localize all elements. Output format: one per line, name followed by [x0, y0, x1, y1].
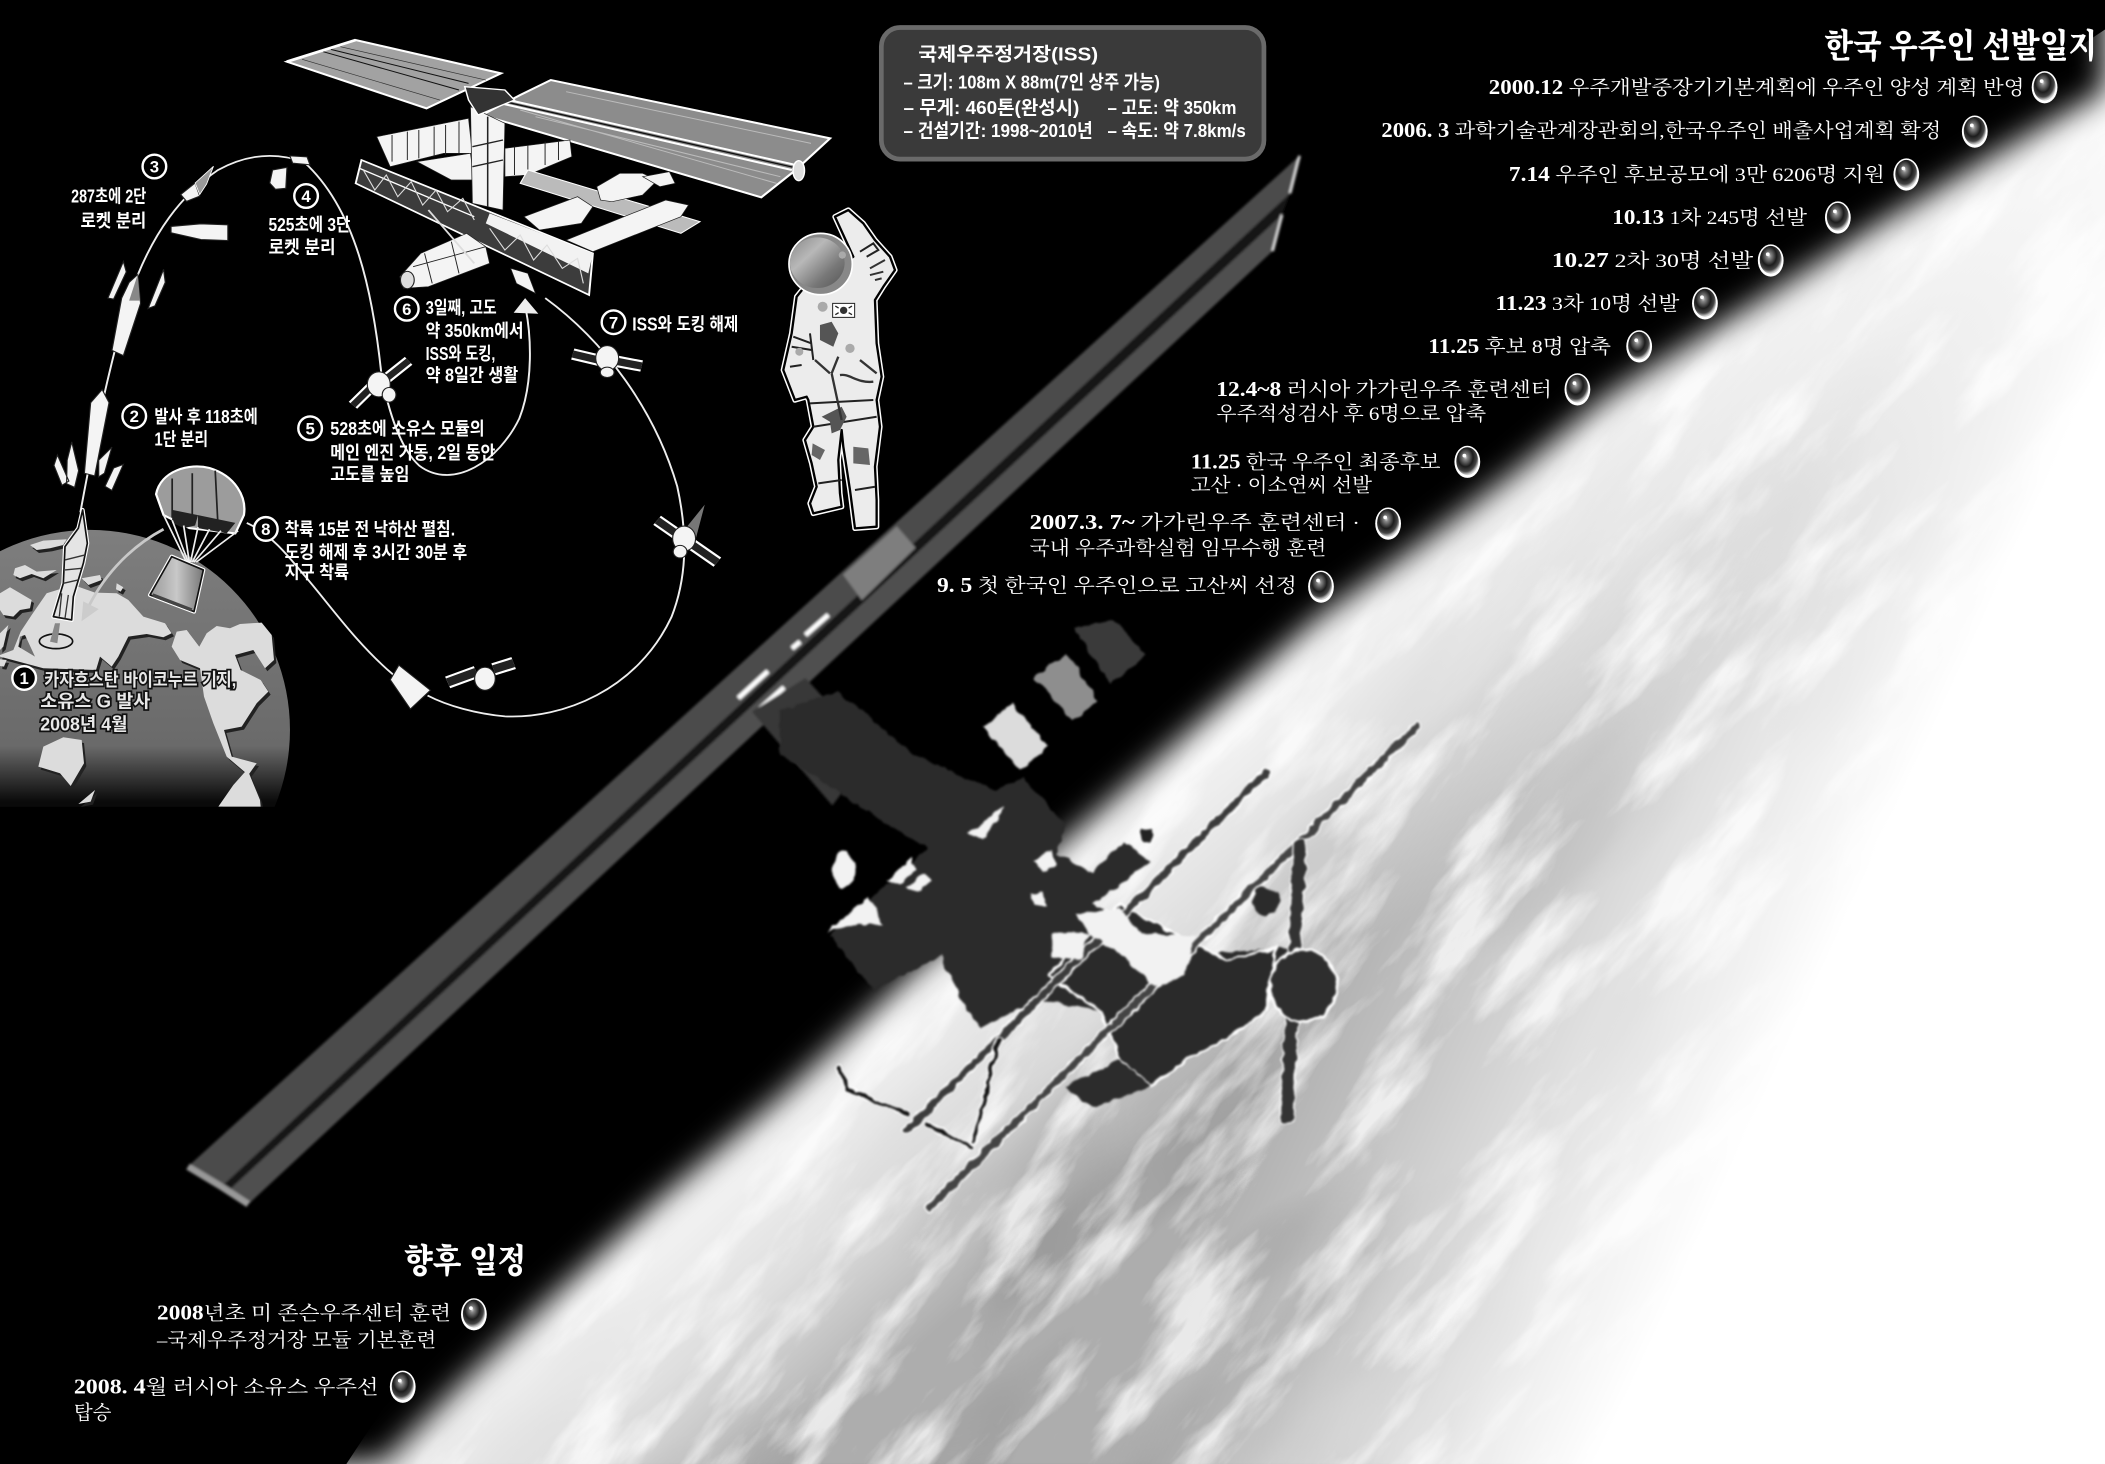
step 8: 8 — [261, 520, 270, 539]
heading: future schedule: 향후 일정 — [404, 1243, 526, 1281]
step 1 — [12, 666, 236, 734]
timeline entry 11.25 final: 고산 · 이소연씨 선발 — [1191, 473, 1372, 496]
timeline entry 9.5: 9. 5 첫 한국인 우주인으로 고산씨 선정 — [937, 574, 1297, 597]
docking module — [400, 210, 536, 293]
schedule entry April 2008: 2008. 4 월 러시아 소유스 우주선 — [74, 1376, 379, 1399]
timeline entry 9.5 — [937, 571, 1334, 603]
right solar array — [482, 80, 830, 197]
schedule entry early 2008: –국제우주정거장 모듈 기본훈련 — [156, 1329, 436, 1352]
step 6: 약 350km에서 — [426, 321, 524, 341]
continents — [0, 539, 276, 810]
step labels for launch sequence — [12, 155, 738, 734]
booms — [838, 727, 1416, 1207]
step 5 — [298, 416, 496, 485]
timeline entry 11.23 — [1496, 287, 1718, 320]
timeline entry 12.4~8: 12.4~8 러시아 가가린우주 훈련센터 — [1216, 378, 1552, 401]
step 4 — [268, 184, 351, 258]
step 5: 528초에 소유스 모듈의 — [330, 419, 485, 439]
step 2: 1단 분리 — [154, 430, 208, 450]
return capsule — [150, 557, 203, 612]
step 1: 카자흐스탄 바이코누르 기지, — [44, 670, 236, 690]
panel: future schedule — [74, 1243, 526, 1424]
ISS spec lines: – 크기: 108m X 88m(7인 상주 가능) — [903, 72, 1160, 93]
step 5: 고도를 높임 — [330, 465, 409, 485]
ISS box title: 국제우주정거장(ISS) — [918, 43, 1098, 64]
step 6: 약 8일간 생활 — [426, 365, 518, 385]
soyuz near step 7 — [573, 346, 642, 378]
step 8: 지구 착륙 — [285, 563, 349, 583]
ISS spec lines: – 무게: 460톤(완성시) — [903, 97, 1079, 118]
step 4: 로켓 분리 — [268, 238, 336, 258]
photo: space station solar arrays — [188, 156, 1300, 1204]
step 3: 3 — [150, 158, 159, 177]
ISS spec lines — [903, 72, 1246, 141]
timeline entry 2007.3.7: 국내 우주과학실험 임무수행 훈련 — [1030, 536, 1326, 559]
left solar array — [287, 40, 501, 108]
globe with launch site — [0, 530, 290, 807]
step 7 — [602, 310, 738, 334]
timeline entry 10.13: 10.13 1차 245명 선발 — [1612, 206, 1807, 229]
timeline entry 11.25: 11.25 후보 8명 압축 — [1428, 335, 1611, 358]
timeline entry 10.13 — [1612, 201, 1851, 234]
step 6: ISS와 도킹, — [426, 344, 495, 364]
timeline entry 7.14: 7.14 우주인 후보공모에 3만 6206명 지원 — [1509, 163, 1885, 186]
timeline entry 11.25 final — [1191, 446, 1480, 496]
bright patches — [827, 806, 1195, 988]
step 7: ISS와 도킹 해제 — [632, 314, 738, 334]
schedule entry early 2008: 2008 년초 미 존슨우주센터 훈련 — [157, 1302, 451, 1325]
launch trajectory and orbit lines — [80, 156, 684, 717]
main truss — [356, 160, 593, 295]
step 8: 도킹 해제 후 3시간 30분 후 — [285, 542, 467, 562]
timeline entry 2006.3 — [1381, 115, 1988, 148]
schedule entry early 2008 — [156, 1298, 487, 1352]
station schematic illustration — [287, 40, 830, 295]
panel: ISS specifications — [881, 28, 1264, 159]
panel: Korean astronaut selection timeline — [937, 28, 2097, 603]
step 8: 착륙 15분 전 낙하산 펼침. — [285, 520, 455, 540]
step 1: 소유스 G 발사 — [40, 691, 151, 711]
step 6: 3일째, 고도 — [426, 298, 497, 318]
step 3: 287초에 2단 — [71, 187, 147, 207]
ISS spec lines: – 건설기간: 1998~2010년 — [903, 120, 1093, 141]
step 6: 6 — [402, 300, 411, 319]
soyuz spacecraft along the orbit — [156, 346, 717, 709]
timeline entry 2000.12: 2000.12 우주개발중장기기본계획에 우주인 양성 계획 반영 — [1489, 76, 2024, 99]
step 7: 7 — [609, 313, 618, 332]
radiators and tower — [377, 87, 572, 210]
timeline entry 11.25 — [1428, 330, 1652, 362]
astronaut illustration — [783, 210, 895, 528]
step 5: 5 — [305, 419, 315, 438]
timeline entry 2000.12 — [1489, 71, 2057, 103]
timeline entry 7.14 — [1509, 158, 1919, 191]
timeline entry 11.23: 11.23 3차 10명 선발 — [1496, 292, 1680, 315]
ISS spec lines: – 속도: 약 7.8km/s — [1108, 120, 1246, 141]
step 2 — [122, 404, 258, 450]
schedule entry April 2008 — [74, 1371, 416, 1424]
step 8 — [254, 517, 467, 583]
step 5: 메인 엔진 가동, 2일 동안 — [330, 443, 496, 463]
step 4: 4 — [301, 187, 311, 206]
astronaut flag — [833, 303, 855, 317]
rocket stages and separated parts — [12, 40, 895, 734]
timeline entry 2007.3.7 — [1030, 507, 1401, 559]
timeline entry 10.27 — [1552, 244, 1784, 277]
step 3: 로켓 분리 — [81, 211, 146, 231]
step 2: 2 — [130, 407, 139, 426]
timeline entry 2007.3.7: 2007.3. 7~ 가가린우주 훈련센터 · — [1030, 511, 1360, 534]
ISS spec lines: – 고도: 약 350km — [1108, 97, 1236, 118]
soyuz near step 5 — [353, 361, 409, 405]
first stage separation — [54, 390, 123, 490]
radiator panels — [983, 620, 1146, 770]
step 2: 발사 후 118초에 — [154, 407, 258, 427]
schedule entry April 2008: 탑승 — [74, 1402, 112, 1424]
parachute — [156, 466, 244, 562]
lower panels and modules — [520, 170, 700, 252]
timeline entry 12.4~8: 우주적성검사 후 6명으로 압축 — [1216, 403, 1486, 425]
astronaut helmet — [789, 233, 852, 295]
soyuz with thrust — [657, 505, 717, 562]
timeline entry 2006.3: 2006. 3 과학기술관계장관회의,한국우주인 배출사업계획 확정 — [1381, 119, 1941, 142]
second stage — [108, 224, 228, 356]
reentry capsule and module — [390, 663, 514, 709]
step 6 — [395, 297, 524, 385]
timeline entry 10.27: 10.27 2차 30명 선발 — [1552, 249, 1754, 272]
timeline entry 12.4~8 — [1216, 373, 1590, 425]
step 4: 525초에 3단 — [268, 215, 351, 235]
step 1: 2008년 4월 — [40, 714, 128, 734]
timeline entry 11.25 final: 11.25 한국 우주인 최종후보 — [1191, 451, 1441, 474]
rocket on launch pad — [39, 510, 87, 649]
third stage — [181, 156, 310, 201]
photo: space station central truss and modules — [780, 620, 1416, 1207]
step 3 — [71, 155, 166, 231]
astronaut suit details — [790, 243, 885, 490]
step 1: 1 — [20, 669, 29, 688]
